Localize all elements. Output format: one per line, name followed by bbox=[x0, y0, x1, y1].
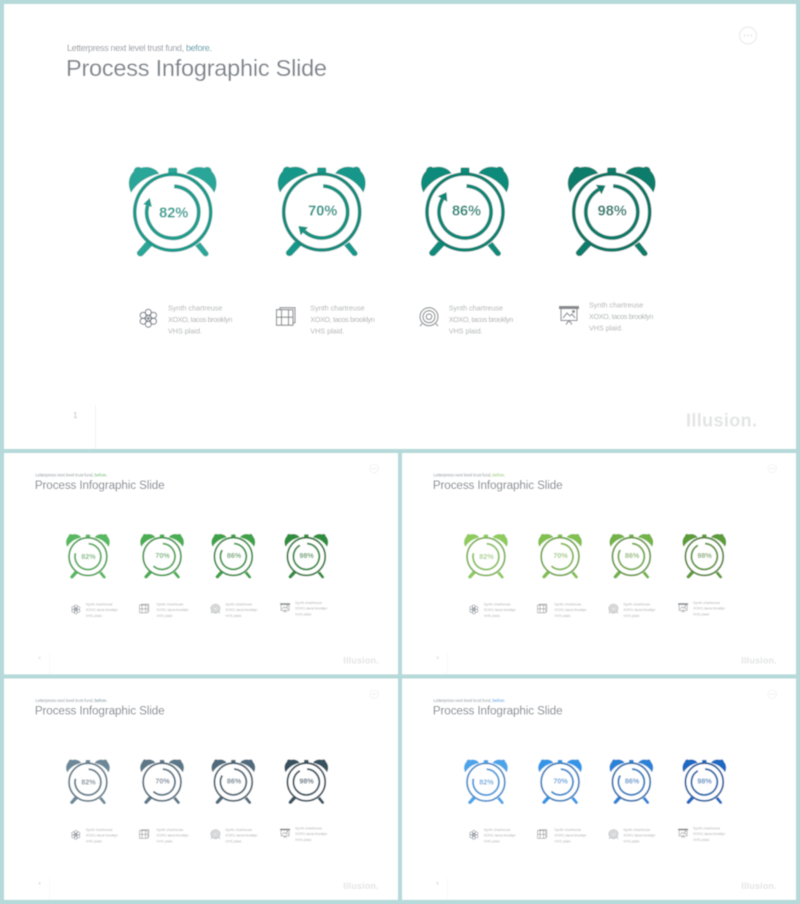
text: item 2: Synth chartreuse bbox=[156, 828, 183, 832]
subtitle: Letterpress next level trust fund, before. bbox=[67, 43, 212, 53]
clock 86%: 86% bbox=[452, 204, 481, 220]
panel: lime slide bbox=[402, 453, 796, 674]
text: item 4 bbox=[693, 827, 725, 842]
text: item 1 bbox=[484, 828, 516, 843]
page number: 4 bbox=[38, 880, 41, 885]
text: item 3: VHS plaid. bbox=[623, 839, 640, 843]
icon: film bbox=[538, 830, 547, 838]
text: item 3 bbox=[225, 603, 257, 618]
panel: slate slide bbox=[4, 678, 398, 900]
text: item 1: VHS plaid. bbox=[86, 614, 103, 618]
icon: presentation board bbox=[678, 829, 688, 838]
text: item 4: Synth chartreuse bbox=[295, 601, 322, 605]
text: item 1 bbox=[484, 603, 516, 618]
clock 98%: 98% bbox=[697, 551, 712, 560]
text: item 4: Synth chartreuse bbox=[693, 601, 720, 605]
title: Process Infographic Slide bbox=[433, 479, 563, 492]
text: item 2: XOXO, tacos brooklyn bbox=[310, 315, 375, 324]
text: item 2: Synth chartreuse bbox=[156, 603, 183, 607]
clock 82%: 82% bbox=[81, 552, 96, 561]
text: item 2: XOXO, tacos brooklyn bbox=[156, 834, 188, 838]
page number: 2 bbox=[38, 655, 41, 660]
clock 98% bbox=[285, 759, 328, 804]
clock 86%: 86% bbox=[625, 551, 640, 560]
text: item 4: Synth chartreuse bbox=[295, 827, 322, 831]
clock 70% bbox=[140, 534, 184, 578]
text: item 1: XOXO, tacos brooklyn bbox=[484, 608, 516, 612]
text: item 1: XOXO, tacos brooklyn bbox=[86, 834, 118, 838]
logo: Illusion. bbox=[741, 881, 777, 891]
subtitle: Letterpress next level trust fund, before. bbox=[433, 698, 505, 703]
text: item 3 bbox=[623, 828, 655, 843]
text: item 1: VHS plaid. bbox=[484, 839, 501, 843]
icon: target bbox=[211, 830, 220, 839]
text: item 1: VHS plaid. bbox=[86, 839, 103, 843]
clock 82% bbox=[66, 760, 110, 804]
icon: target bbox=[211, 604, 220, 613]
clock 70% bbox=[278, 167, 366, 256]
text: item 1: Synth chartreuse bbox=[86, 603, 113, 607]
clock 98%: 98% bbox=[299, 777, 314, 786]
logo: Illusion. bbox=[343, 881, 379, 891]
text: item 3: Synth chartreuse bbox=[225, 603, 252, 607]
text: item 2 bbox=[554, 828, 586, 843]
text: item 1: VHS plaid. bbox=[484, 614, 501, 618]
text: item 3: VHS plaid. bbox=[623, 614, 640, 618]
clock 86% bbox=[610, 534, 653, 578]
panel: blue slide bbox=[402, 678, 796, 900]
clock 98%: 98% bbox=[598, 204, 627, 220]
text: item 4: XOXO, tacos brooklyn bbox=[295, 607, 327, 611]
text: item 4: XOXO, tacos brooklyn bbox=[693, 832, 725, 836]
clock 86% bbox=[212, 534, 255, 578]
clock 70%: 70% bbox=[155, 777, 170, 786]
clock 86%: 86% bbox=[625, 777, 640, 786]
text: item 2: VHS plaid. bbox=[310, 326, 344, 336]
text: item 1: XOXO, tacos brooklyn bbox=[168, 315, 232, 324]
panel: green slide bbox=[4, 453, 398, 674]
clock 82% bbox=[464, 760, 508, 804]
text: item 2 bbox=[554, 603, 586, 618]
text: item 4: VHS plaid. bbox=[295, 612, 312, 616]
icon: menu dots bbox=[370, 690, 378, 698]
text: item 1: XOXO, tacos brooklyn bbox=[484, 834, 516, 838]
title: Process Infographic Slide bbox=[35, 479, 165, 492]
clock 70% bbox=[538, 759, 582, 804]
text: item 1 bbox=[86, 828, 118, 843]
clock 98% bbox=[683, 759, 726, 804]
icon: presentation board bbox=[280, 603, 290, 612]
text: item 2: Synth chartreuse bbox=[554, 603, 581, 607]
icon: target bbox=[609, 604, 618, 613]
text: item 2: VHS plaid. bbox=[156, 614, 173, 618]
text: item 3: XOXO, tacos brooklyn bbox=[449, 315, 513, 324]
subtitle: Letterpress next level trust fund, before. bbox=[35, 698, 107, 703]
text: item 2: XOXO, tacos brooklyn bbox=[554, 834, 586, 838]
clock 70% bbox=[538, 534, 582, 578]
text: item 2 bbox=[156, 603, 188, 618]
clock 82%: 82% bbox=[81, 778, 96, 787]
icon: menu dots bbox=[740, 27, 756, 44]
text: item 4: VHS plaid. bbox=[295, 838, 312, 842]
text: item 3: XOXO, tacos brooklyn bbox=[225, 834, 257, 838]
text: item 2 bbox=[310, 304, 375, 336]
text: item 3 bbox=[225, 828, 257, 843]
text: item 2: Synth chartreuse bbox=[554, 828, 581, 832]
text: item 2: XOXO, tacos brooklyn bbox=[554, 608, 586, 612]
text: item 3: Synth chartreuse bbox=[449, 304, 503, 313]
text: item 1 bbox=[86, 603, 118, 618]
clock 86% bbox=[421, 167, 509, 256]
text: item 3: Synth chartreuse bbox=[225, 828, 252, 832]
icon: presentation board bbox=[678, 603, 688, 612]
text: item 4: XOXO, tacos brooklyn bbox=[693, 607, 725, 611]
text: item 4 bbox=[589, 301, 654, 332]
icon: atom bbox=[470, 605, 478, 614]
text: item 2: Synth chartreuse bbox=[310, 304, 365, 313]
clock 82% bbox=[464, 534, 508, 579]
logo: Illusion. bbox=[741, 655, 777, 665]
icon: film bbox=[140, 604, 149, 613]
clock 86% bbox=[610, 759, 653, 804]
clock 82%: 82% bbox=[479, 552, 494, 561]
text: item 1: Synth chartreuse bbox=[484, 828, 511, 832]
icon: target bbox=[420, 308, 438, 326]
text: item 4 bbox=[295, 601, 327, 616]
clock 82%: 82% bbox=[479, 778, 494, 787]
icon: menu dots bbox=[768, 464, 776, 473]
clock 86% bbox=[212, 759, 255, 804]
text: item 4: VHS plaid. bbox=[589, 324, 623, 332]
text: item 1: XOXO, tacos brooklyn bbox=[86, 608, 118, 612]
text: item 2: VHS plaid. bbox=[156, 839, 173, 843]
clock 86%: 86% bbox=[227, 777, 242, 786]
clock 70%: 70% bbox=[308, 204, 337, 220]
text: item 1: Synth chartreuse bbox=[484, 603, 511, 607]
text: item 1: Synth chartreuse bbox=[168, 304, 222, 313]
page number: 5 bbox=[436, 880, 439, 885]
text: item 4: XOXO, tacos brooklyn bbox=[295, 832, 327, 836]
subtitle: Letterpress next level trust fund, before. bbox=[433, 472, 505, 477]
clock 98%: 98% bbox=[299, 551, 314, 560]
page number: 3 bbox=[436, 655, 439, 660]
clock 98%: 98% bbox=[697, 777, 712, 786]
icon: atom bbox=[470, 830, 478, 839]
icon: film bbox=[276, 308, 295, 325]
icon: atom bbox=[140, 309, 156, 327]
text: item 3: Synth chartreuse bbox=[623, 603, 650, 607]
clock 98% bbox=[568, 167, 656, 256]
icon: film bbox=[140, 830, 149, 838]
text: item 1 bbox=[168, 304, 232, 336]
clock 70%: 70% bbox=[155, 551, 170, 560]
logo: Illusion. bbox=[686, 411, 757, 431]
icon: atom bbox=[72, 605, 80, 614]
clock 70%: 70% bbox=[553, 551, 568, 560]
text: item 4 bbox=[295, 827, 327, 842]
icon: menu dots bbox=[370, 464, 378, 473]
text: item 2: VHS plaid. bbox=[554, 839, 571, 843]
text: item 3: XOXO, tacos brooklyn bbox=[623, 834, 655, 838]
clock 82% bbox=[129, 167, 217, 256]
clock 70% bbox=[140, 759, 184, 804]
text: item 4: VHS plaid. bbox=[693, 838, 710, 842]
logo: Illusion. bbox=[343, 655, 379, 665]
text: item 3 bbox=[623, 603, 655, 618]
text: item 3: XOXO, tacos brooklyn bbox=[623, 608, 655, 612]
clock 70%: 70% bbox=[553, 777, 568, 786]
clock 98% bbox=[285, 534, 328, 578]
text: item 3: VHS plaid. bbox=[225, 614, 242, 618]
icon: atom bbox=[72, 830, 80, 839]
title: Process Infographic Slide bbox=[35, 704, 165, 717]
text: item 4: VHS plaid. bbox=[693, 612, 710, 616]
icon: presentation board bbox=[560, 306, 578, 324]
text: item 4: Synth chartreuse bbox=[589, 301, 643, 310]
subtitle: Letterpress next level trust fund, before. bbox=[35, 472, 107, 477]
title: Process Infographic Slide bbox=[66, 55, 327, 81]
text: item 3 bbox=[449, 304, 513, 336]
text: item 1: Synth chartreuse bbox=[86, 828, 113, 832]
icon: menu dots bbox=[768, 690, 776, 698]
title: Process Infographic Slide bbox=[433, 704, 563, 717]
text: item 4: XOXO, tacos brooklyn bbox=[589, 312, 654, 321]
text: item 2: XOXO, tacos brooklyn bbox=[156, 608, 188, 612]
text: item 4 bbox=[693, 601, 725, 616]
text: item 3: XOXO, tacos brooklyn bbox=[225, 608, 257, 612]
text: item 3: VHS plaid. bbox=[449, 326, 483, 336]
clock 98% bbox=[683, 534, 726, 578]
page number: 1 bbox=[73, 411, 78, 420]
text: item 3: VHS plaid. bbox=[225, 839, 242, 843]
text: item 2: VHS plaid. bbox=[554, 614, 571, 618]
icon: presentation board bbox=[280, 829, 290, 838]
clock 82% bbox=[66, 534, 110, 579]
text: item 1: VHS plaid. bbox=[168, 326, 202, 336]
clock 82%: 82% bbox=[159, 205, 188, 221]
panel: main teal slide bbox=[4, 4, 796, 449]
icon: film bbox=[538, 604, 547, 613]
text: item 2 bbox=[156, 828, 188, 843]
icon: target bbox=[609, 830, 618, 839]
clock 86%: 86% bbox=[227, 551, 242, 560]
text: item 3: Synth chartreuse bbox=[623, 828, 650, 832]
text: item 4: Synth chartreuse bbox=[693, 827, 720, 831]
